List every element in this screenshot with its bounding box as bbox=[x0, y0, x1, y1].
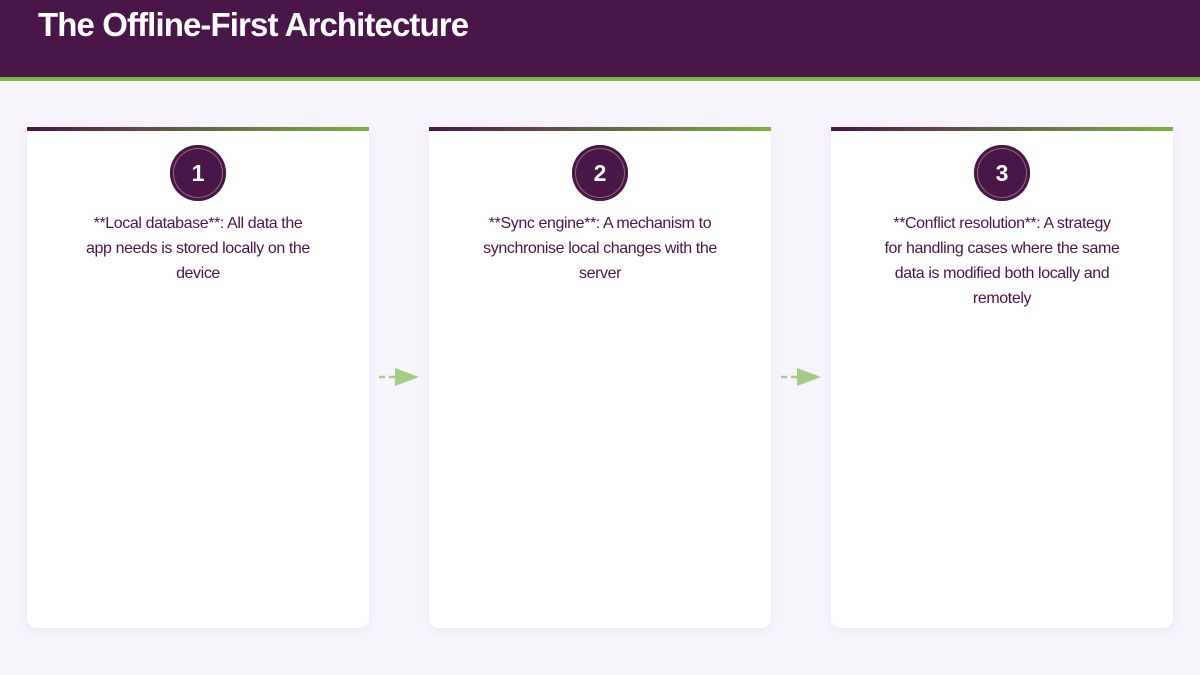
panel: sync engine bbox=[429, 127, 771, 628]
badge 1: 1 bbox=[192, 160, 204, 186]
panel: local database bbox=[27, 127, 369, 628]
badge 2: 2 bbox=[594, 160, 606, 186]
text 2: **Sync engine**: A mechanism to synchronise local changes with the server bbox=[483, 215, 717, 282]
title: The Offline-First Architecture bbox=[38, 6, 468, 43]
text 1: **Local database**: All data the app needs is stored locally on the device bbox=[86, 215, 310, 282]
header bbox=[0, 0, 1200, 81]
text 3: **Conflict resolution**: A strategy for handling cases where the same data is modified both locally and remotely bbox=[885, 215, 1119, 307]
arrow 2 bbox=[781, 368, 821, 386]
panel: conflict resolution bbox=[831, 127, 1173, 628]
badge 1 bbox=[170, 145, 226, 201]
arrow 1 bbox=[379, 368, 419, 386]
badge 3 bbox=[974, 145, 1030, 201]
badge 2 bbox=[572, 145, 628, 201]
badge 3: 3 bbox=[996, 160, 1008, 186]
